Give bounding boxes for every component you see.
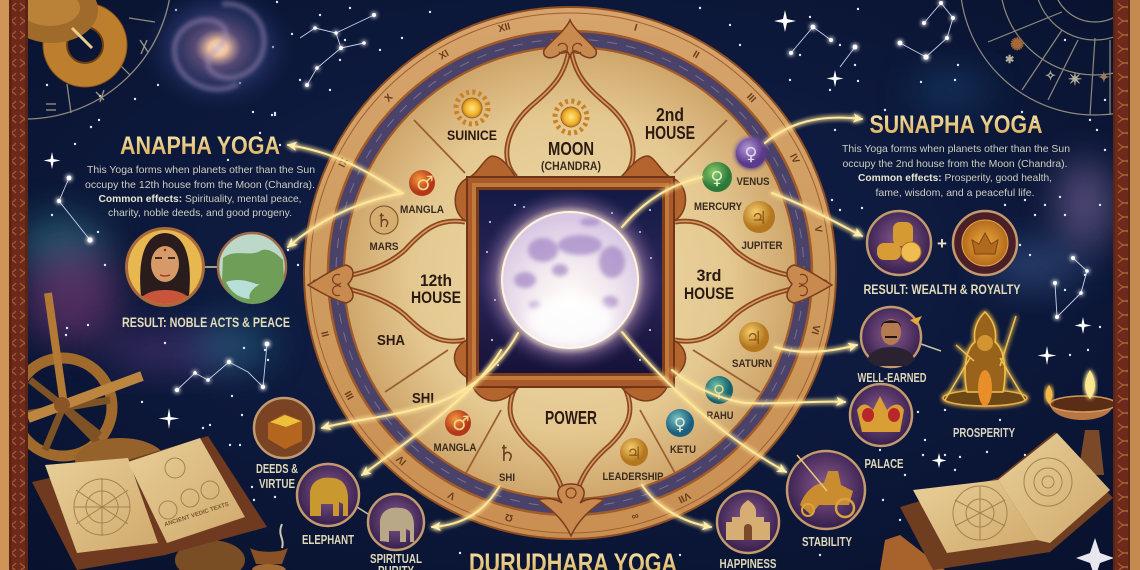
planet: mars symbol: ♄ xyxy=(375,210,393,232)
text block: sunapha description xyxy=(842,143,1070,199)
planet: mars symbol xyxy=(370,206,398,234)
zodiac chart: top right: ✱ xyxy=(1005,54,1014,66)
wheel outer numeral ring: II xyxy=(691,49,701,61)
starfield inside panel xyxy=(484,192,657,368)
result label: sunapha: RESULT: WEALTH & ROYALTY xyxy=(864,282,1020,297)
full moon xyxy=(502,212,638,348)
label: palace: PALACE xyxy=(864,456,904,471)
planet: venus xyxy=(736,138,766,168)
heading: anapha yoga: ANAPHA YOGA xyxy=(120,132,280,160)
wheel outer numeral ring: III xyxy=(744,91,758,105)
wheel outer numeral ring: Ω xyxy=(504,511,514,523)
arrow: leadership to happiness xyxy=(642,485,711,527)
text block: sunapha description: occupy the 2nd house from the Moon (Chandra). xyxy=(842,158,1068,170)
wheel: house chart xyxy=(304,7,836,539)
wheel divider lines xyxy=(385,120,760,473)
wheel right finial xyxy=(787,265,832,303)
wheel purple band xyxy=(336,39,804,507)
zodiac chart: top right: ✦ xyxy=(1098,69,1110,85)
wheel labels: MERCURY xyxy=(694,201,743,213)
icon: snake bowl, lower centre-left xyxy=(250,524,288,570)
wheel labels: POWER xyxy=(545,408,597,428)
planet: mangla upper: ♂ xyxy=(416,171,434,195)
wheel outer numeral ring: IX xyxy=(337,156,351,169)
wheel outer numeral ring xyxy=(304,7,836,539)
wheel outer numeral ring: XI xyxy=(437,48,451,62)
text block: anapha description: charity, noble deeds, and good progeny. xyxy=(108,207,292,219)
zodiac chart: top right: ✧ xyxy=(1045,68,1056,83)
sun icon: suinice xyxy=(456,92,488,124)
wheel labels: HOUSE xyxy=(411,288,461,307)
zodiac chart: top right: ✺ xyxy=(1010,35,1024,54)
panel: anapha yoga xyxy=(85,132,315,330)
glowing arrows xyxy=(288,118,862,527)
book: lower right xyxy=(880,432,1114,570)
label: elephant: ELEPHANT xyxy=(302,532,354,547)
label: prosperity: PROSPERITY xyxy=(953,425,1015,440)
decoration: sextant wheel, lower left xyxy=(14,293,142,456)
icon: treasure chest xyxy=(254,398,314,458)
arrow: moon to mercury xyxy=(622,177,702,227)
wheel outer numeral ring: II xyxy=(320,330,332,338)
icon: spiritual purity elephant xyxy=(368,494,424,550)
wheel labels: LEADERSHIP xyxy=(602,471,664,483)
zodiac chart: top right: ✴ xyxy=(1068,70,1082,89)
wheel labels: SHA xyxy=(377,332,405,349)
planet: jupiter xyxy=(743,201,775,233)
wheel labels: SUINICE xyxy=(447,127,497,143)
wheel outer numeral ring: ∞ xyxy=(630,510,640,522)
panel: durudhara yoga results xyxy=(254,307,1027,570)
wheel labels: VENUS xyxy=(736,176,770,188)
label: stability: STABILITY xyxy=(802,534,852,549)
label: deeds and virtue xyxy=(256,461,298,491)
wheel labels: 2nd xyxy=(656,105,684,125)
wheel outer numeral ring: IV xyxy=(394,452,409,467)
label: well-earned: WELL-EARNED xyxy=(858,370,926,385)
wheel labels: 12th xyxy=(420,271,452,290)
icon: woman portrait xyxy=(125,227,205,310)
label: deeds and virtue: DEEDS & xyxy=(256,461,298,476)
wheel labels: HOUSE xyxy=(684,284,734,303)
planet: rahu: ♀ xyxy=(713,382,725,402)
planet: shi symbol: ♄ xyxy=(497,442,517,467)
zodiac chart: top left xyxy=(0,0,172,119)
icon: gold coins xyxy=(867,211,931,275)
plus sign: + xyxy=(937,234,947,253)
label: spiritual purity xyxy=(370,551,422,570)
planet: venus: ♀ xyxy=(744,144,758,165)
planet: mercury: ♀ xyxy=(710,168,724,189)
text block: anapha description: Common effects: Spirituality, mental peace, xyxy=(98,193,302,205)
result label: anapha: RESULT: NOBLE ACTS & PEACE xyxy=(122,314,290,330)
wheel labels: (CHANDRA) xyxy=(541,159,601,173)
planet icons xyxy=(370,138,775,467)
icon: royal crown xyxy=(953,211,1017,275)
wheel labels: RAHU xyxy=(706,410,734,422)
text block: anapha description: occupy the 12th house from the Moon (Chandra). xyxy=(85,179,315,191)
text block: sunapha description: fame, wisdom, and a peaceful life. xyxy=(876,187,1034,199)
arrow: shi to spiritual purity xyxy=(432,487,499,527)
planet: mangla lower xyxy=(445,410,471,436)
wheel outer numeral ring: III xyxy=(343,388,357,401)
wheel bottom finial xyxy=(538,484,604,536)
label: spiritual purity: SPIRITUAL xyxy=(370,551,422,566)
text block: anapha description: This Yoga forms when planets other than the Sun xyxy=(87,164,315,176)
arrow: mangla to anapha title xyxy=(288,145,400,192)
wheel outer numeral ring: X xyxy=(383,92,396,105)
connectors xyxy=(357,344,941,525)
icon: well-earned man xyxy=(861,307,922,367)
icon: oil lamp, lower right xyxy=(1046,370,1116,475)
planet: jupiter: ♃ xyxy=(751,208,767,229)
wheel outer numeral ring: V xyxy=(812,225,824,234)
arrow: rahu to palace xyxy=(672,370,845,403)
constellations xyxy=(57,1,1089,392)
planet: mangla lower: ♂ xyxy=(452,411,470,435)
wheel labels: JUPITER xyxy=(742,240,783,252)
planet: rahu xyxy=(705,376,733,404)
wheel corner domes xyxy=(454,156,686,401)
text block: anapha description xyxy=(85,164,315,219)
arrow: moon to treasure xyxy=(322,333,518,428)
planet: leadership xyxy=(620,438,648,466)
planet: leadership: ♃ xyxy=(626,444,642,464)
planet: ketu: ♀ xyxy=(674,415,686,435)
icon: river landscape xyxy=(218,233,286,304)
wheel labels: HOUSE xyxy=(645,123,695,143)
right border xyxy=(1113,0,1140,570)
wheel labels: SHI xyxy=(412,390,434,407)
wheel ogee arches xyxy=(315,40,825,525)
arrow: moon to elephant xyxy=(362,350,501,475)
wheel labels: KETU xyxy=(670,444,696,456)
wheel top finial xyxy=(544,20,596,58)
wheel parchment disc xyxy=(345,48,795,498)
text block: sunapha description: This Yoga forms when planets other than the Sun xyxy=(842,143,1070,155)
arrow: mangla to noble acts xyxy=(288,193,403,247)
wheel labels: SHI xyxy=(499,472,515,484)
planet: mangla upper xyxy=(409,170,435,196)
sun icon: moon house xyxy=(555,101,587,133)
wheel labels: MOON xyxy=(548,139,594,159)
text block: sunapha description: Common effects: Prosperity, good health, xyxy=(858,172,1052,184)
book: lower left xyxy=(32,436,267,570)
wheel labels: SATURN xyxy=(732,358,772,370)
wheel outer numeral ring: I xyxy=(633,22,639,34)
planet: saturn xyxy=(739,322,769,352)
arrow: jupiter to wealth xyxy=(772,193,862,236)
arrow: venus to sunapha title xyxy=(765,118,862,143)
icon: sparkle watermark xyxy=(1076,538,1114,570)
connector: portrait to landscape xyxy=(205,266,218,268)
planet: ketu xyxy=(666,409,694,437)
book: lower left: ANCIENT VEDIC TEXTS xyxy=(164,502,230,528)
wheel labels: MANGLA xyxy=(434,442,477,454)
label: deeds and virtue: VIRTUE xyxy=(259,476,295,491)
icon: chariot xyxy=(787,451,865,529)
wheel outer numeral ring: V xyxy=(446,488,457,501)
icon: elephant xyxy=(297,464,359,526)
left border xyxy=(0,0,28,570)
central moon panel xyxy=(467,177,674,387)
wheel labels: MARS xyxy=(370,241,398,253)
icon: palace crown xyxy=(850,384,912,446)
icon: golden goddess prosperity xyxy=(943,312,1027,406)
arrow: saturn to well-earned xyxy=(775,345,857,352)
wheel labels: MANGLA xyxy=(400,204,444,216)
planet: saturn: ♃ xyxy=(746,328,762,349)
galaxy spiral xyxy=(140,0,296,112)
wheel labels: 3rd xyxy=(696,266,722,285)
wheel labels xyxy=(370,105,783,484)
heading: sunapha yoga: SUNAPHA YOGA xyxy=(870,111,1042,139)
icon: happiness palace xyxy=(717,491,779,553)
astrolabe brass: top left xyxy=(6,0,127,87)
zodiac chart: top right xyxy=(960,0,1140,115)
wheel outer numeral ring: XII xyxy=(497,21,512,35)
wheel outer numeral ring: VII xyxy=(676,489,692,505)
wheel left finial xyxy=(308,265,353,303)
panel: sunapha yoga xyxy=(842,111,1070,297)
wheel outer numeral ring: VI xyxy=(809,324,821,336)
wheel outer numeral ring: IV xyxy=(787,152,801,166)
planet: mercury xyxy=(702,162,732,192)
arrow: moon to chariot xyxy=(622,332,786,472)
